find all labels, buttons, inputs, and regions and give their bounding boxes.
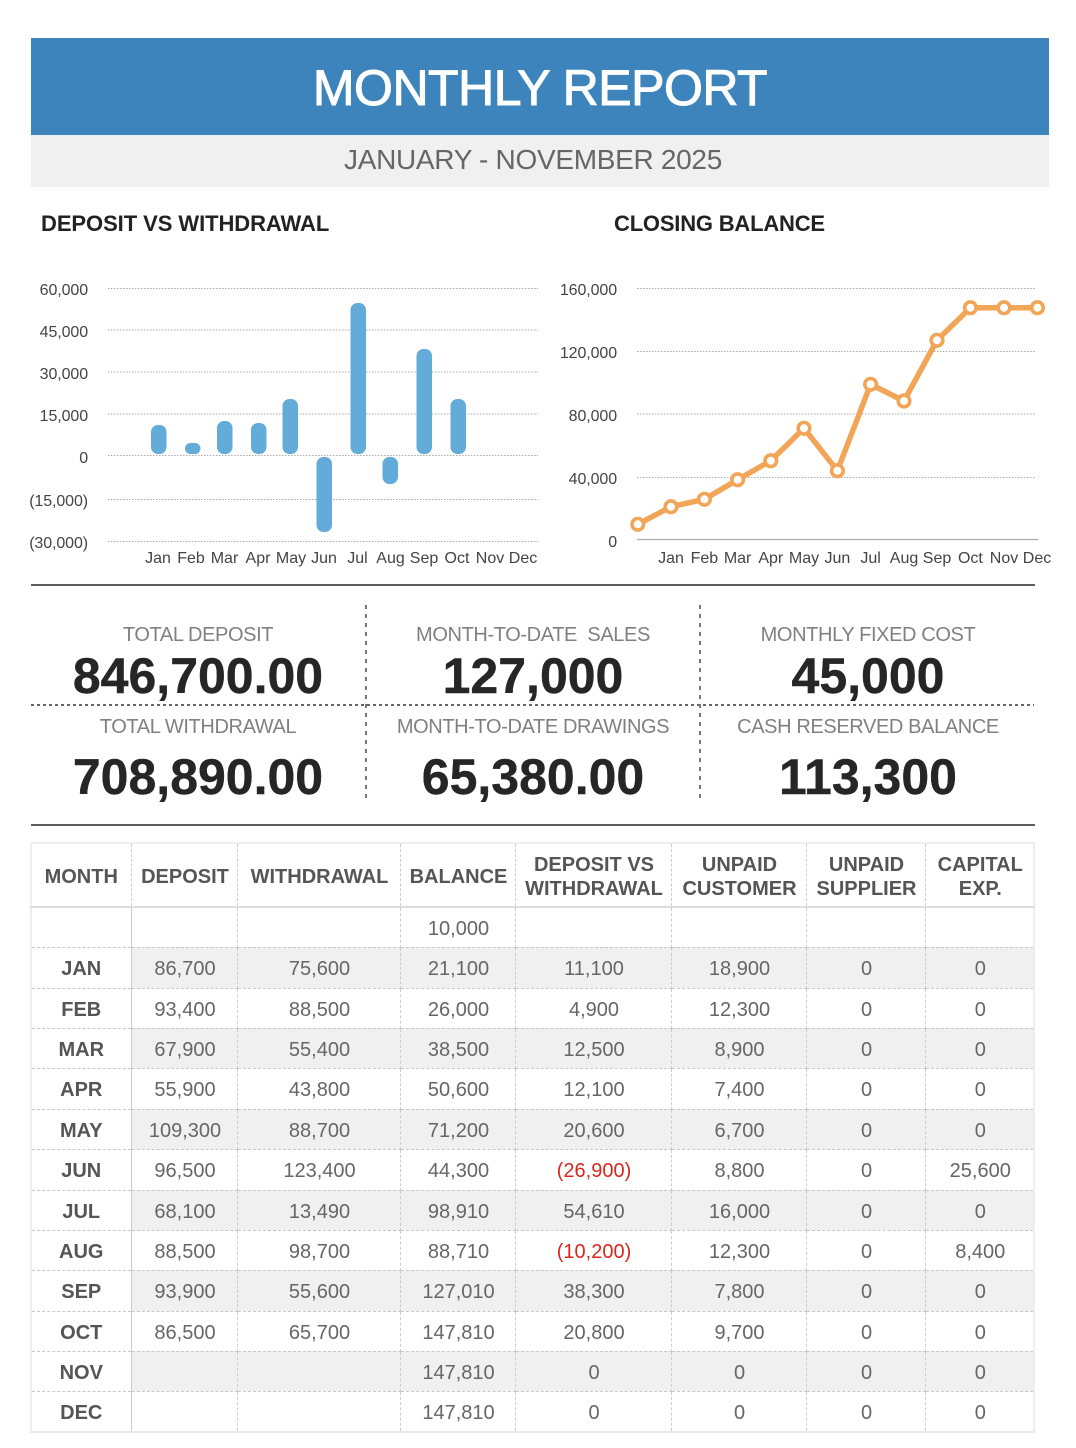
monthly data table: 12,300 <box>709 1240 770 1262</box>
subtitle band <box>31 135 1049 187</box>
monthly data table: 0 <box>975 1402 986 1424</box>
monthly data table: EXP. <box>959 878 1002 900</box>
monthly data table: 147,810 <box>422 1402 495 1424</box>
monthly data table: 44,300 <box>428 1160 489 1182</box>
monthly data table: 65,700 <box>289 1322 350 1344</box>
monthly data table: 7,800 <box>714 1281 765 1303</box>
stat: month-to-date drawings: MONTH-TO-DATE DRAWINGS <box>397 716 669 738</box>
x axis labels: Jun <box>311 550 337 567</box>
monthly data table: 0 <box>975 998 986 1020</box>
y axis labels: 45,000 <box>40 324 88 341</box>
monthly data table: 123,400 <box>283 1160 356 1182</box>
y axis labels: 0 <box>608 534 617 551</box>
stat: total deposit: TOTAL DEPOSIT <box>123 624 273 646</box>
monthly data table: 0 <box>861 1120 872 1142</box>
monthly data table: 0 <box>861 1038 872 1060</box>
y axis labels: 15,000 <box>40 408 88 425</box>
monthly data table: 67,900 <box>154 1038 216 1060</box>
monthly data table: 0 <box>861 1362 872 1384</box>
monthly data table: MAY <box>60 1120 103 1142</box>
monthly data table: 13,490 <box>289 1200 350 1222</box>
monthly data table: WITHDRAWAL <box>525 878 663 900</box>
monthly data table: 38,500 <box>428 1038 489 1060</box>
monthly data table: 43,800 <box>289 1079 350 1101</box>
monthly data table: 0 <box>861 1281 872 1303</box>
monthly data table: 55,400 <box>289 1038 350 1060</box>
monthly data table: WITHDRAWAL <box>251 866 388 888</box>
y axis labels: 40,000 <box>569 471 617 488</box>
monthly data table: 75,600 <box>289 958 350 980</box>
x axis labels <box>145 550 537 567</box>
monthly data table <box>30 842 1035 1433</box>
monthly data table: DEPOSIT <box>141 866 229 888</box>
monthly data table: 0 <box>975 1281 986 1303</box>
monthly data table: AUG <box>59 1240 103 1262</box>
monthly data table: 54,610 <box>563 1200 625 1222</box>
y axis labels: 60,000 <box>40 282 88 299</box>
x axis labels: Jul <box>860 550 881 567</box>
x axis labels <box>658 550 1051 567</box>
monthly data table: DEPOSIT VS <box>534 854 654 876</box>
stat: monthly fixed cost: MONTHLY FIXED COST <box>761 624 975 646</box>
monthly data table: (26,900) <box>557 1160 631 1182</box>
monthly data table: NOV <box>60 1362 103 1384</box>
monthly data table: 16,000 <box>709 1200 770 1222</box>
monthly data table: FEB <box>61 998 101 1020</box>
stat: total deposit: 846,700.00 <box>73 648 323 704</box>
monthly data table: 4,900 <box>569 998 619 1020</box>
monthly data table: 21,100 <box>428 958 489 980</box>
y axis labels: (30,000) <box>29 535 88 552</box>
stat: cash reserved balance: 113,300 <box>779 749 957 805</box>
monthly data table: 86,500 <box>154 1322 216 1344</box>
monthly data table: 0 <box>861 1200 872 1222</box>
monthly data table: BALANCE <box>410 866 507 888</box>
panel: key figures <box>31 605 1034 805</box>
monthly data table: 38,300 <box>563 1281 625 1303</box>
x axis labels: Sep <box>923 550 951 567</box>
x axis labels: Feb <box>691 550 718 567</box>
monthly data table: 127,010 <box>422 1281 495 1303</box>
x axis labels: Apr <box>758 550 784 567</box>
y axis labels: 160,000 <box>560 282 617 299</box>
x axis labels: Mar <box>211 550 239 567</box>
monthly data table: 96,500 <box>154 1160 216 1182</box>
monthly data table: 0 <box>734 1402 745 1424</box>
stat: total withdrawal: 708,890.00 <box>73 749 323 805</box>
x axis labels: Jan <box>658 550 684 567</box>
monthly data table: 0 <box>975 1120 986 1142</box>
monthly data table: 0 <box>861 1240 872 1262</box>
monthly data table: UNPAID <box>702 854 777 876</box>
x axis labels: Aug <box>376 550 405 567</box>
y axis labels: 120,000 <box>560 345 617 362</box>
monthly data table: 50,600 <box>428 1079 489 1101</box>
monthly data table: 0 <box>861 958 872 980</box>
monthly data table: JUN <box>61 1160 101 1182</box>
title banner: MONTHLY REPORT <box>313 60 767 116</box>
y axis labels: 30,000 <box>40 366 88 383</box>
stat: month-to-date drawings: 65,380.00 <box>422 749 644 805</box>
monthly data table: 0 <box>861 998 872 1020</box>
monthly data table: 98,910 <box>428 1200 489 1222</box>
x axis labels: Jun <box>825 550 850 567</box>
monthly data table: SUPPLIER <box>816 878 917 900</box>
monthly data table: 0 <box>975 1038 986 1060</box>
monthly data table: 12,500 <box>563 1038 625 1060</box>
x axis labels: May <box>789 550 819 567</box>
stat: monthly fixed cost <box>761 624 976 704</box>
x axis labels: Oct <box>445 550 470 567</box>
monthly data table: MAR <box>58 1038 104 1060</box>
monthly data table: UNPAID <box>829 854 904 876</box>
stat: monthly fixed cost: 45,000 <box>792 648 944 704</box>
y axis labels: (15,000) <box>29 493 88 510</box>
monthly data table: 0 <box>975 1362 986 1384</box>
y axis labels: 80,000 <box>569 408 617 425</box>
monthly data table: 86,700 <box>154 958 216 980</box>
x axis labels: Sep <box>410 550 438 567</box>
monthly data table: 10,000 <box>428 918 489 940</box>
x axis labels: Jan <box>145 550 171 567</box>
monthly data table: 0 <box>861 1160 872 1182</box>
monthly data table: 93,900 <box>154 1281 216 1303</box>
monthly data table: 26,000 <box>428 998 489 1020</box>
x axis labels: Feb <box>177 550 205 567</box>
monthly data table: 8,400 <box>955 1240 1005 1262</box>
monthly data table: 98,700 <box>289 1240 350 1262</box>
monthly data table: 11,100 <box>564 958 624 980</box>
monthly data table: 9,700 <box>714 1322 765 1344</box>
monthly data table: 55,600 <box>289 1281 350 1303</box>
monthly data table: 147,810 <box>422 1362 495 1384</box>
stat: cash reserved balance: CASH RESERVED BALANCE <box>737 716 999 738</box>
y axis labels: 0 <box>79 450 88 467</box>
x axis labels: Apr <box>246 550 271 567</box>
monthly data table: 0 <box>861 1402 872 1424</box>
x axis labels: Nov <box>990 550 1018 567</box>
heading: closing balance: CLOSING BALANCE <box>614 211 825 236</box>
x axis labels: Aug <box>890 550 918 567</box>
title banner <box>31 38 1049 135</box>
stat: total withdrawal <box>73 716 323 805</box>
monthly data table: 0 <box>975 1322 986 1344</box>
monthly data table: 12,300 <box>709 998 770 1020</box>
monthly data table: 109,300 <box>149 1120 221 1142</box>
monthly data table: DEC <box>60 1402 102 1424</box>
monthly data table: CUSTOMER <box>682 878 797 900</box>
monthly data table: JUL <box>62 1200 100 1222</box>
monthly data table: 8,900 <box>714 1038 765 1060</box>
heading: deposit vs withdrawal: DEPOSIT VS WITHDRAWAL <box>41 211 329 236</box>
monthly data table: 8,800 <box>714 1160 765 1182</box>
monthly data table: 71,200 <box>428 1120 489 1142</box>
monthly data table: 0 <box>734 1362 745 1384</box>
monthly data table: 88,500 <box>154 1240 216 1262</box>
x axis labels: Dec <box>1023 550 1051 567</box>
y axis labels <box>29 282 88 552</box>
monthly data table: 0 <box>588 1402 600 1424</box>
monthly data table: 55,900 <box>154 1079 216 1101</box>
bar chart: deposit vs withdrawal <box>29 282 538 567</box>
monthly data table: OCT <box>60 1322 102 1344</box>
line chart: closing balance <box>560 282 1051 567</box>
stat: month-to-date sales: 127,000 <box>443 648 623 704</box>
monthly data table: 93,400 <box>154 998 216 1020</box>
monthly data table: SEP <box>61 1281 101 1303</box>
monthly data table: 20,800 <box>563 1322 625 1344</box>
monthly data table: 12,100 <box>563 1079 625 1101</box>
monthly data table: 6,700 <box>714 1120 765 1142</box>
x axis labels: Jul <box>347 550 368 567</box>
subtitle band: JANUARY - NOVEMBER 2025 <box>344 144 722 175</box>
x axis labels: Mar <box>724 550 752 567</box>
monthly data table: 0 <box>975 958 986 980</box>
x axis labels: Nov <box>476 550 504 567</box>
stat: cash reserved balance <box>737 716 999 805</box>
monthly data table: 68,100 <box>154 1200 216 1222</box>
monthly data table: 18,900 <box>709 958 770 980</box>
monthly data table: CAPITAL <box>938 854 1023 876</box>
monthly data table: 0 <box>975 1200 986 1222</box>
stat: month-to-date sales <box>416 624 650 704</box>
balance line <box>638 308 1037 524</box>
monthly data table: 0 <box>975 1079 986 1101</box>
monthly data table: APR <box>60 1079 102 1101</box>
x axis labels: May <box>276 550 306 567</box>
stat: month-to-date sales: MONTH-TO-DATE SALES <box>416 624 650 646</box>
stat: month-to-date drawings <box>397 716 669 805</box>
monthly data table: 20,600 <box>563 1120 625 1142</box>
monthly data table: 0 <box>861 1079 872 1101</box>
monthly data table: MONTH <box>45 866 118 888</box>
x axis labels: Oct <box>958 550 983 567</box>
monthly data table: 7,400 <box>714 1079 765 1101</box>
monthly data table: JAN <box>61 958 101 980</box>
monthly data table: 0 <box>861 1322 872 1344</box>
monthly data table: 88,500 <box>289 998 350 1020</box>
x axis labels: Dec <box>509 550 537 567</box>
monthly data table: 88,700 <box>289 1120 350 1142</box>
data point markers <box>632 302 1043 530</box>
monthly data table: 88,710 <box>428 1240 489 1262</box>
monthly data table: 25,600 <box>950 1160 1011 1182</box>
monthly data table: 0 <box>588 1362 600 1384</box>
stat: total withdrawal: TOTAL WITHDRAWAL <box>100 716 296 738</box>
bars <box>151 303 466 532</box>
monthly data table: (10,200) <box>557 1240 631 1262</box>
monthly data table: 147,810 <box>422 1322 495 1344</box>
y axis labels <box>560 282 617 551</box>
